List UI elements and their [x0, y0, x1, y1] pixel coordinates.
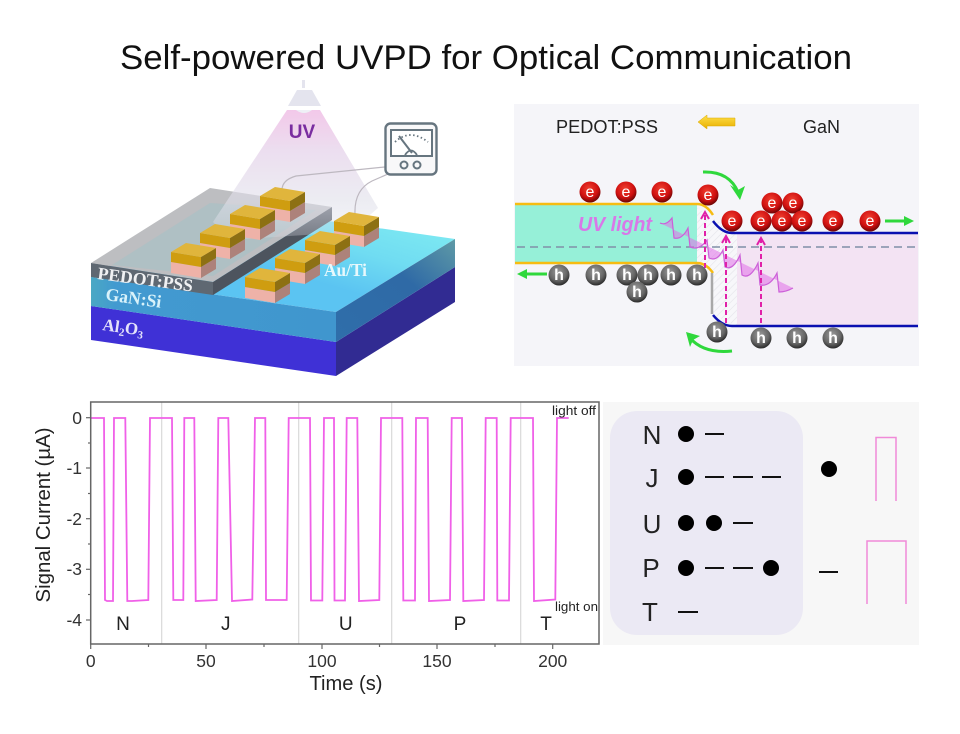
letter labels: P	[454, 614, 466, 635]
heading: PEDOT:PSS: PEDOT:PSS	[556, 117, 658, 137]
green arrows	[517, 172, 914, 351]
electrons: e	[778, 213, 787, 230]
morse row: P	[642, 553, 779, 583]
y axis title: Signal Current (µA)	[33, 428, 55, 602]
electrons: e	[789, 195, 798, 212]
wires	[282, 165, 404, 214]
panel: device schematic	[91, 80, 455, 376]
morse row: N: N	[643, 420, 661, 450]
holes: h	[554, 267, 564, 284]
Fermi level	[517, 246, 918, 248]
label: Al2O3: O	[124, 318, 139, 339]
electrodes: on GaN	[245, 212, 379, 303]
axes frame	[91, 402, 599, 644]
GaN band edges	[713, 221, 918, 326]
holes: h	[591, 267, 601, 284]
letter labels: N	[116, 614, 130, 635]
heading: GaN: GaN	[803, 117, 840, 137]
signal trace	[91, 418, 569, 601]
panel background	[603, 402, 919, 645]
icon: UV lamp	[288, 80, 321, 113]
morse row: J	[646, 463, 781, 493]
panel: band diagram	[514, 104, 919, 366]
holes	[548, 264, 844, 348]
holes: h	[643, 267, 653, 284]
electrons: e	[757, 213, 766, 230]
letter labels	[116, 614, 552, 635]
morse row: P: P	[642, 553, 660, 583]
legend: short pulse	[876, 438, 896, 501]
x axis tick labels: 150	[422, 651, 452, 671]
legend: long pulse	[867, 541, 906, 604]
y axis tick labels	[66, 408, 82, 630]
label: Au/Ti: Au/Ti	[324, 260, 367, 280]
morse row: N	[643, 420, 724, 450]
label: UV light: UV light	[578, 214, 653, 236]
electrons: e	[866, 213, 875, 230]
electrons: e	[728, 213, 737, 230]
electrons: e	[658, 184, 667, 201]
electrodes: on PEDOT:PSS	[171, 187, 305, 278]
holes: h	[666, 267, 676, 284]
panel: signal current chart	[33, 402, 599, 695]
morse row: T: T	[642, 597, 658, 627]
PEDOT:PSS region	[515, 204, 697, 263]
label: GaN:Si: GaN:Si	[104, 284, 163, 312]
x axis tick labels	[86, 651, 568, 671]
junction offset	[711, 273, 713, 314]
excitation arrows	[701, 212, 765, 323]
electrons: e	[829, 213, 838, 230]
morse row: T	[642, 597, 698, 627]
layer: PEDOT:PSS	[91, 188, 332, 295]
letter dividers	[162, 402, 521, 644]
arrow: yellow field direction	[698, 115, 735, 129]
holes: h	[712, 324, 722, 341]
electrons: e	[586, 184, 595, 201]
layer: GaN:Si	[91, 204, 455, 342]
depletion hatch	[697, 208, 737, 326]
electrons: e	[798, 213, 807, 230]
x axis tick labels: 0	[86, 651, 96, 671]
y axis tick labels: -3	[66, 559, 82, 579]
letter labels: T	[540, 614, 552, 635]
substrate: Al2O3 layer	[91, 267, 455, 376]
annotation: light on: light on	[555, 599, 598, 614]
morse row: U: U	[643, 509, 661, 539]
axis ticks	[86, 418, 553, 649]
electrons	[580, 182, 880, 232]
UV light beam	[213, 110, 378, 240]
title: Self-powered UVPD for Optical Communication	[120, 39, 852, 77]
label: UV: UV	[289, 122, 316, 143]
holes: h	[622, 267, 632, 284]
legend: dash symbol	[819, 571, 838, 573]
label: Al2O3: 2	[118, 326, 126, 339]
morse row: J: J	[646, 463, 658, 493]
legend: dot symbol	[821, 461, 837, 477]
holes: h	[792, 330, 802, 347]
label: Al2O3: Al	[101, 315, 121, 336]
y axis tick labels: -2	[66, 509, 82, 529]
label: Al2O3: 3	[137, 329, 144, 342]
x axis tick labels: 100	[307, 651, 337, 671]
icon: meter	[386, 124, 436, 174]
holes: h	[756, 330, 766, 347]
panel background	[514, 104, 919, 366]
x axis title: Time (s)	[310, 673, 382, 695]
label: PEDOT:PSS: PEDOT:PSS	[96, 263, 194, 295]
electrons: e	[768, 195, 777, 212]
letter labels: J	[221, 614, 230, 635]
y axis tick labels: 0	[72, 408, 82, 428]
morse table box	[610, 411, 803, 635]
x axis tick labels: 50	[196, 651, 216, 671]
annotation: light off: light off	[552, 403, 596, 418]
holes: h	[828, 330, 838, 347]
GaN region	[737, 233, 918, 326]
holes: h	[692, 267, 702, 284]
UV light wave	[660, 218, 793, 292]
x axis tick labels: 200	[538, 651, 568, 671]
letter labels: U	[339, 614, 353, 635]
y axis tick labels: -1	[66, 458, 82, 478]
electrons: e	[622, 184, 631, 201]
morse row: U	[643, 509, 753, 539]
electrons: e	[704, 187, 713, 204]
panel: morse code	[603, 402, 919, 645]
holes: h	[632, 284, 642, 301]
PEDOT:PSS band edges	[515, 204, 713, 273]
y axis tick labels: -4	[66, 610, 82, 630]
